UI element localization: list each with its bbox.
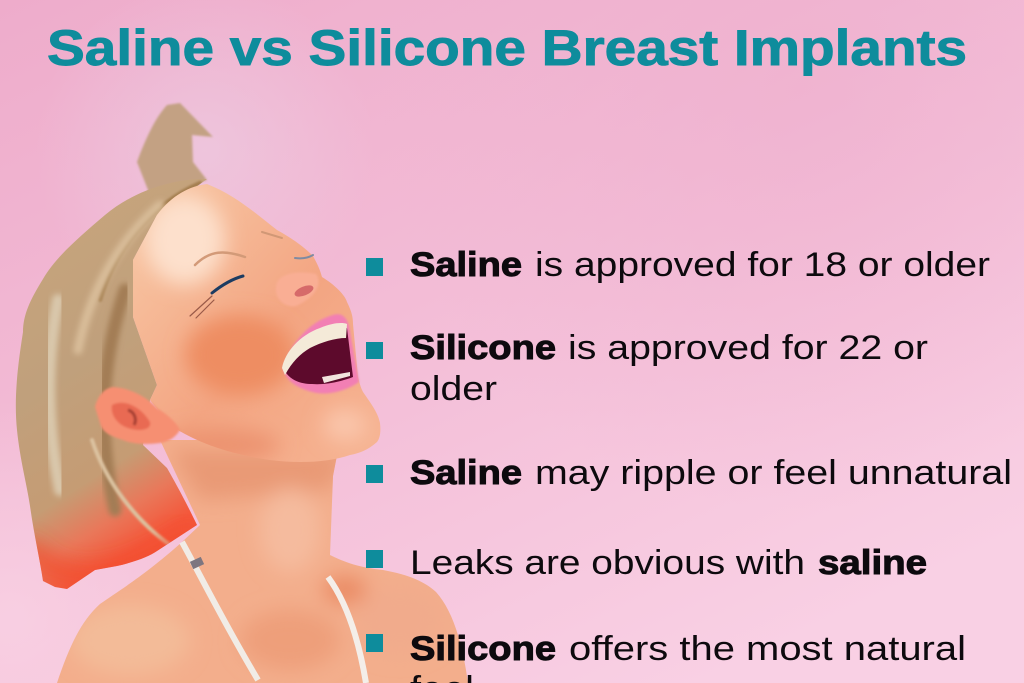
- bullet 4: saline: [818, 544, 927, 582]
- bullet 3: [366, 454, 1012, 492]
- shoulders and neck: [57, 440, 468, 683]
- hair: [16, 179, 207, 589]
- bullet 3: Saline: [410, 454, 522, 492]
- title: Saline vs Silicone Breast Implants: [47, 20, 967, 76]
- face: [133, 184, 380, 462]
- bullet 5: [366, 630, 966, 683]
- bullet 1: [366, 246, 990, 284]
- bullet list: [366, 246, 1012, 683]
- bullet 2: is approved for 22 or: [568, 329, 928, 367]
- nose: [276, 273, 319, 306]
- bullet 4: Leaks are obvious with: [410, 544, 805, 582]
- swimsuit straps: [182, 542, 366, 683]
- bullet 2: older: [410, 370, 497, 408]
- bullet 2: [366, 329, 928, 408]
- ear: [95, 387, 180, 444]
- bullet 4: [366, 544, 927, 582]
- bullet 2: Silicone: [410, 329, 556, 367]
- illustration: laughing woman: [16, 103, 468, 683]
- hair tuft: [137, 103, 213, 195]
- bullet 1: Saline: [410, 246, 522, 284]
- bullet 5: offers the most natural: [569, 630, 966, 668]
- bullet 1: is approved for 18 or older: [535, 246, 990, 284]
- bullet 3: may ripple or feel unnatural: [535, 454, 1012, 492]
- mouth: [282, 314, 359, 394]
- bullet 5: Silicone: [410, 630, 556, 668]
- closed eyes and brow: [190, 232, 313, 318]
